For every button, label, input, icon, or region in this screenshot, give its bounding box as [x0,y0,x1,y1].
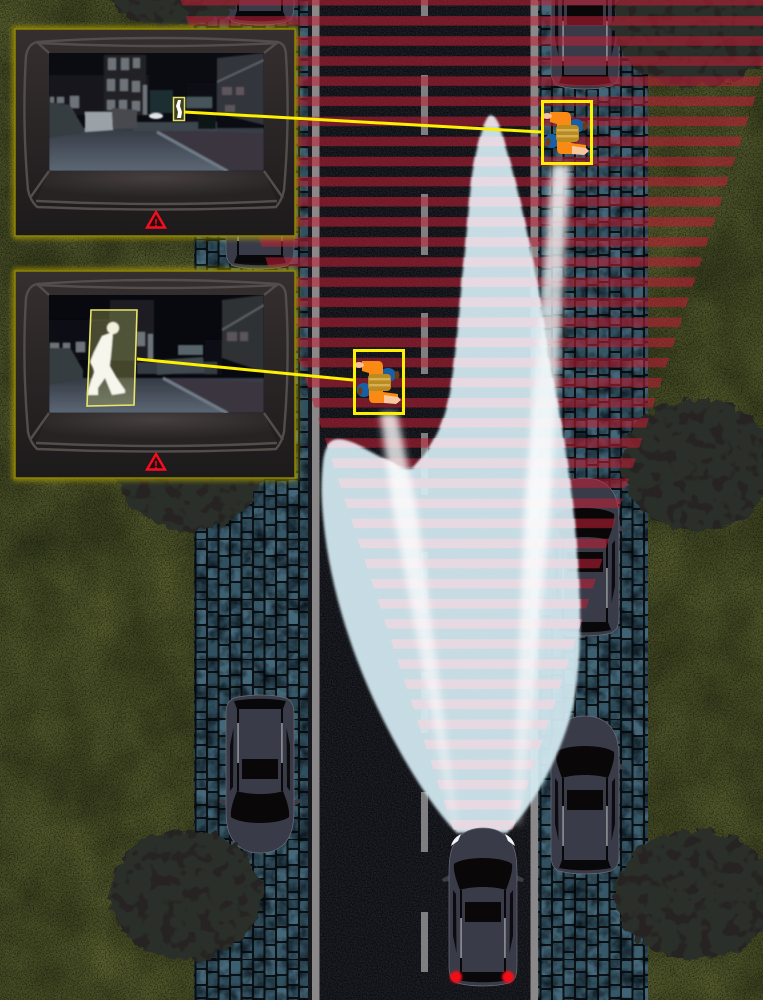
connector line: display 2 to near pedestrian [137,359,353,380]
parked cars [219,0,626,874]
detection zone stripes seen inside the light [326,116,582,830]
panel: night vision display, near pedestrian [15,271,295,478]
light streak to near pedestrian [380,413,458,825]
right cobblestone sidewalk [538,0,648,1000]
left cobblestone sidewalk [194,0,312,1000]
red detection zone stripes [180,0,763,830]
panel: night vision display, far pedestrian [15,29,295,236]
road centre dashes [421,0,428,972]
main car with headlights and tail lights [442,828,524,986]
thermal camera scene 1 [49,53,264,171]
near pedestrian in detection box [354,350,404,414]
light streak to far pedestrian [512,165,570,825]
road surface [308,0,538,1000]
icon: warning triangle [147,454,165,472]
connector line: display 1 to far pedestrian [184,112,541,132]
thermal camera scene 2 [49,295,264,413]
icon: warning triangle: ! [154,218,158,230]
far pedestrian in detection box [542,102,592,164]
icon: warning triangle [147,212,165,230]
icon: warning triangle: ! [154,460,158,472]
headlight beam [322,115,580,833]
